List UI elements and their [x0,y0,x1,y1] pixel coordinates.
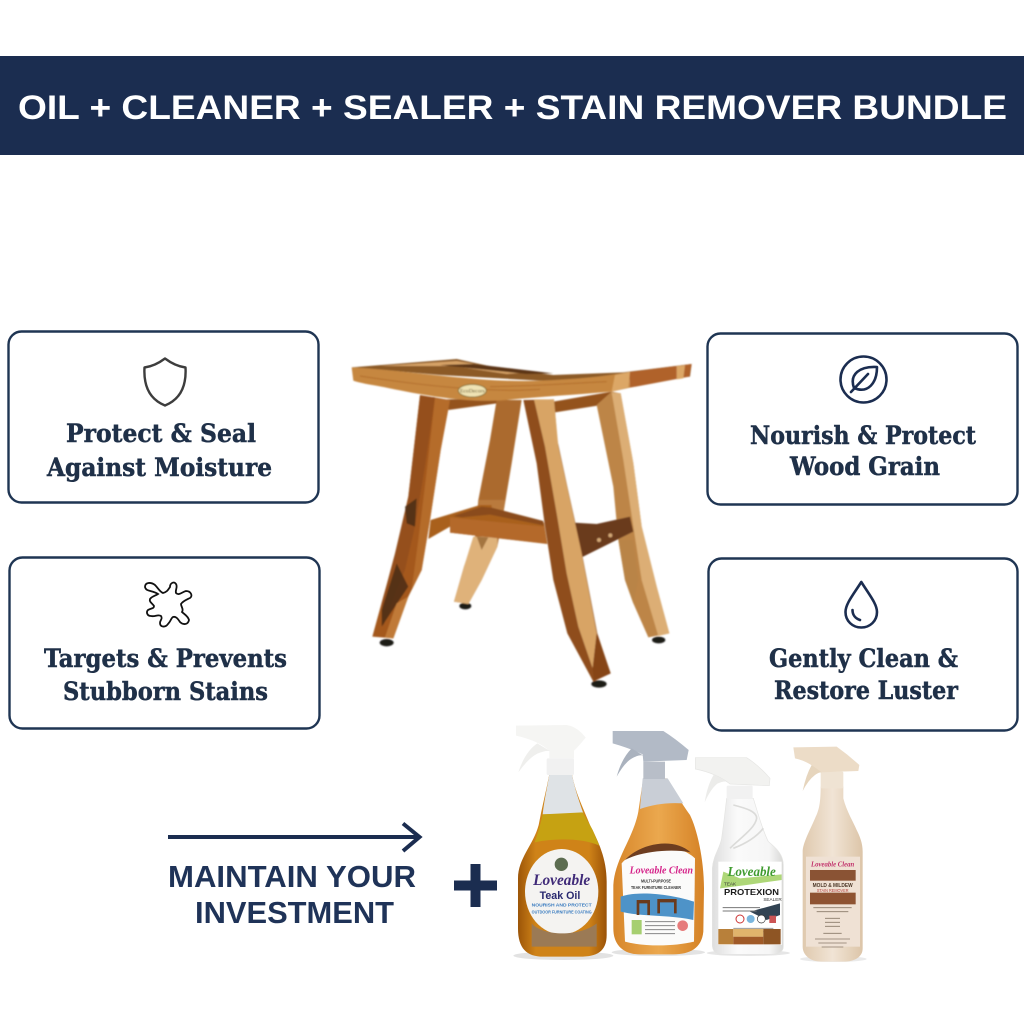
front center leg [523,399,611,682]
seat top [352,359,692,381]
teak stool photo [352,359,692,688]
text: protect and seal: Against Moisture [46,453,272,482]
text: targets stains: Stubborn Stains [63,677,268,706]
panel: protect and seal [8,332,318,502]
text: clean and restore: Gently Clean & [769,644,958,673]
bottle: teak oil: NOURISH AND PROTECT [532,903,592,909]
bottle: sealer: SEALER [763,897,782,902]
call to action text: INVESTMENT [195,895,394,930]
back right leg [597,392,669,637]
call to action text: MAINTAIN YOUR [168,859,416,894]
text: nourish wood grain: Nourish & Protect [750,421,976,450]
bottle: cleaner: Loveable Clean [629,865,693,876]
call to action arrow [168,824,420,851]
call to action text [168,859,416,930]
stool feet [380,603,665,688]
text: targets stains [44,644,287,706]
bottle: cleaner: TEAK FURNITURE CLEANER [631,885,681,890]
text: protect and seal [46,419,272,482]
bottle: stain remover: MOLD & MILDEW [813,883,854,889]
seat front edge [352,367,630,401]
stretcher [428,505,633,557]
icon: leaf in circle [840,356,886,402]
bottle: teak oil: OUTDOOR FURNITURE COATING [532,909,592,915]
text: clean and restore [769,644,959,705]
text: nourish wood grain: Wood Grain [789,452,940,481]
panel: nourish wood grain [708,334,1018,504]
bottle: cleaner: MULTI-PURPOSE [641,879,671,884]
bottle: stain remover: STAIN REMOVER [817,888,849,893]
text: protect and seal: Protect & Seal [66,419,256,448]
text: targets stains: Targets & Prevents [44,644,287,673]
bottle: sealer: PROTEXION [724,887,779,897]
back aprons [447,392,612,412]
bottle: sealer [695,758,790,956]
bottle: cleaner [612,731,705,956]
maker badge: EcoDecors [460,389,485,395]
title banner: OIL + CLEANER + SEALER + STAIN REMOVER BUNDLE [18,89,1007,127]
panel: targets stains [10,558,320,728]
front left leg [372,395,450,638]
text: nourish wood grain [750,421,976,481]
bottle: sealer: Loveable [727,864,776,879]
bottle: teak oil [513,725,613,960]
icon: shield [144,358,186,406]
text: clean and restore: Restore Luster [774,676,959,705]
bottle: teak oil: Teak Oil [540,890,580,902]
product bottles [513,725,867,962]
back center leg [454,400,522,604]
icon: stain splat [145,583,191,627]
title banner [0,56,1024,155]
bottle: sealer: TEAK [724,882,737,887]
bottle: teak oil: Loveable [532,872,590,889]
icon: water drop [846,582,877,628]
maker badge [458,384,486,397]
panel: clean and restore [708,558,1018,730]
bottle: stain remover: Loveable Clean [810,861,854,869]
bottle: stain remover [793,747,867,962]
plus sign [454,864,497,907]
